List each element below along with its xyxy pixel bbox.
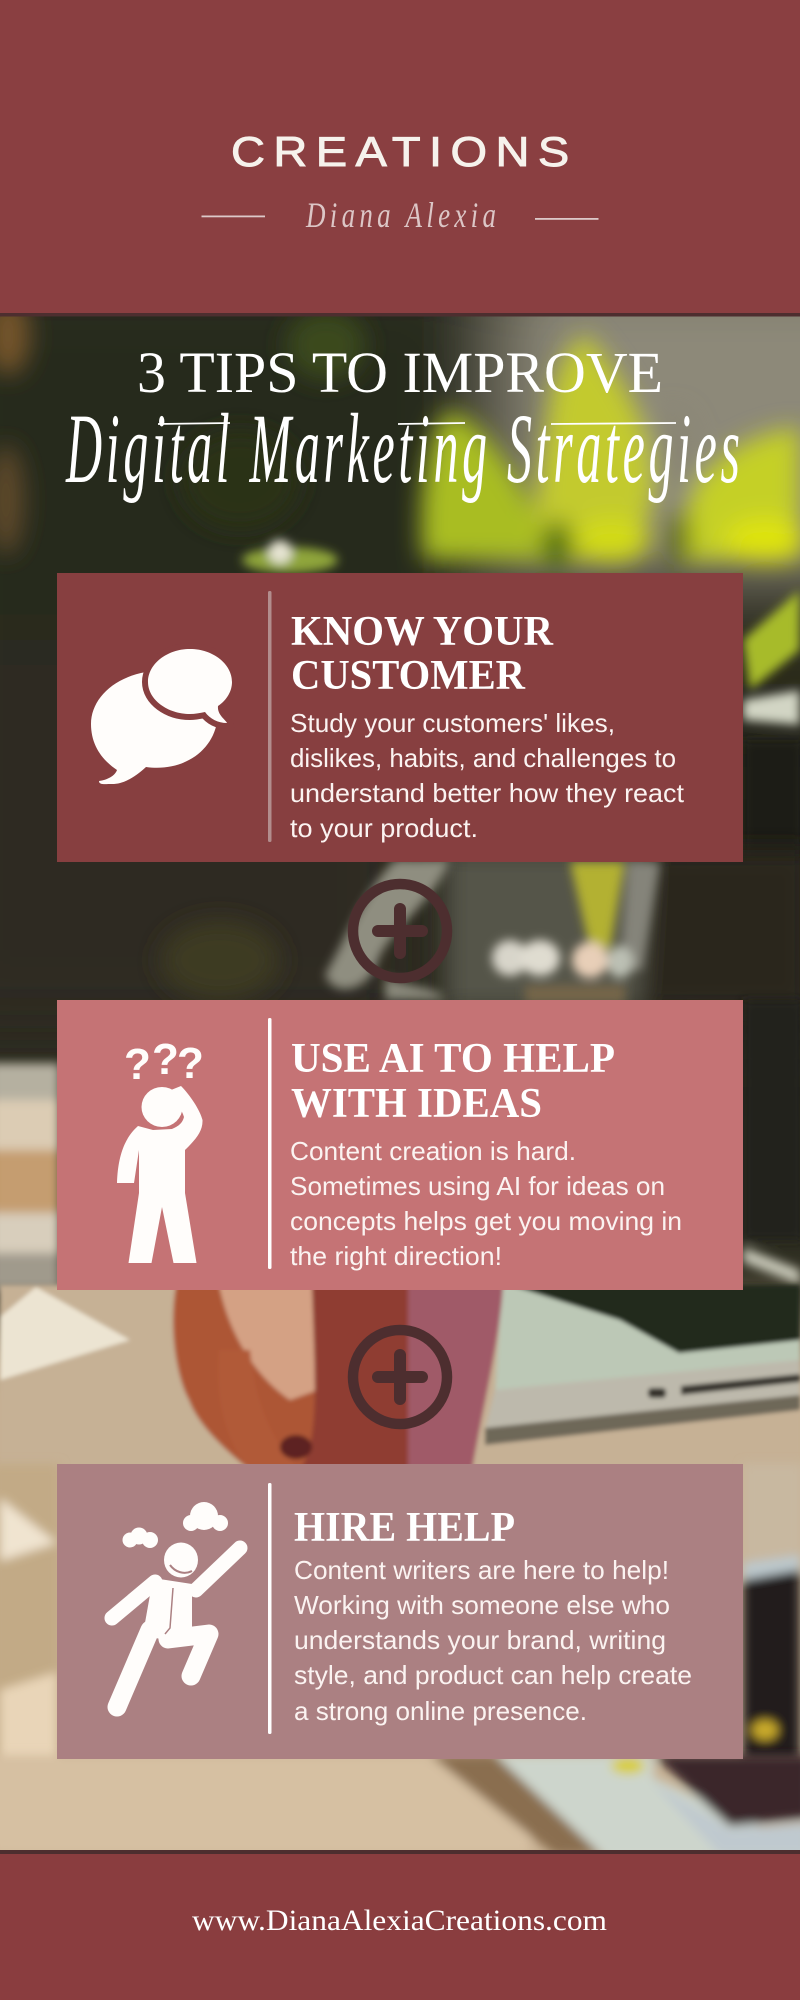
- title: [65, 340, 740, 505]
- panel: know your customer: [57, 573, 743, 862]
- heading: HIRE HELP: [294, 1505, 515, 1551]
- logo: left rule: [202, 216, 265, 217]
- icon: leaping man with clouds: [112, 1502, 240, 1707]
- header bottom border: [0, 313, 800, 316]
- heading: USE AI TO HELP: [291, 1036, 615, 1082]
- divider: [268, 591, 272, 842]
- icon: speech bubbles: [91, 649, 232, 784]
- body text: Content writers are here to help!: [294, 1555, 669, 1585]
- body text: Content creation is hard.: [290, 1136, 576, 1166]
- body text: understand better how they react: [290, 778, 685, 808]
- icon: confused person: [117, 1035, 204, 1263]
- footer website link text: www.DianaAlexiaCreations.com: [192, 1904, 607, 1937]
- body text: Study your customers' likes,: [290, 708, 615, 738]
- panel: know your customer: CUSTOMER: [291, 653, 526, 699]
- body text: [290, 708, 685, 843]
- logo: right rule: [535, 218, 598, 220]
- icon: plus in circle 2: [353, 1330, 447, 1424]
- title script: long crossbars: [158, 423, 676, 424]
- body text: to your product.: [290, 813, 478, 843]
- body text: [294, 1555, 692, 1726]
- question marks: [124, 1035, 204, 1089]
- desk, mug and laptop: [0, 1285, 800, 1470]
- logo: CREATIONS: CREATIONS: [231, 129, 569, 175]
- heading: KNOW YOUR: [291, 609, 554, 655]
- body text: understands your brand, writing: [294, 1625, 666, 1655]
- body text: a strong online presence.: [294, 1696, 587, 1726]
- body text: concepts helps get you moving in: [290, 1206, 682, 1236]
- question marks: ?: [124, 1040, 151, 1089]
- top header band: [0, 0, 800, 314]
- title line: 3 TIPS TO IMPROVE: 3 TIPS TO IMPROVE: [137, 340, 663, 405]
- question marks: ?: [177, 1039, 204, 1088]
- question marks: ?: [152, 1035, 179, 1084]
- logo wordmark: [202, 129, 598, 235]
- title script: Digital Marketing Strategies: Digital Marketing Strategies: [65, 395, 740, 505]
- panel: hire help: [57, 1464, 743, 1759]
- body text: dislikes, habits, and challenges to: [290, 743, 676, 773]
- body text: the right direction!: [290, 1241, 502, 1271]
- divider: [268, 1483, 272, 1734]
- body text: [290, 1136, 682, 1271]
- logo: Diana Alexia signature: Diana Alexia: [305, 194, 496, 235]
- panel: use AI to help with ideas: [57, 1000, 743, 1290]
- footer top border: [0, 1850, 800, 1854]
- icon: plus in circle 1: [353, 884, 447, 978]
- footer band: [0, 1854, 800, 2000]
- divider: [268, 1018, 272, 1269]
- body text: Working with someone else who: [294, 1590, 670, 1620]
- body text: style, and product can help create: [294, 1660, 692, 1690]
- panel: use AI to help with ideas: WITH IDEAS: [291, 1081, 542, 1127]
- body text: Sometimes using AI for ideas on: [290, 1171, 665, 1201]
